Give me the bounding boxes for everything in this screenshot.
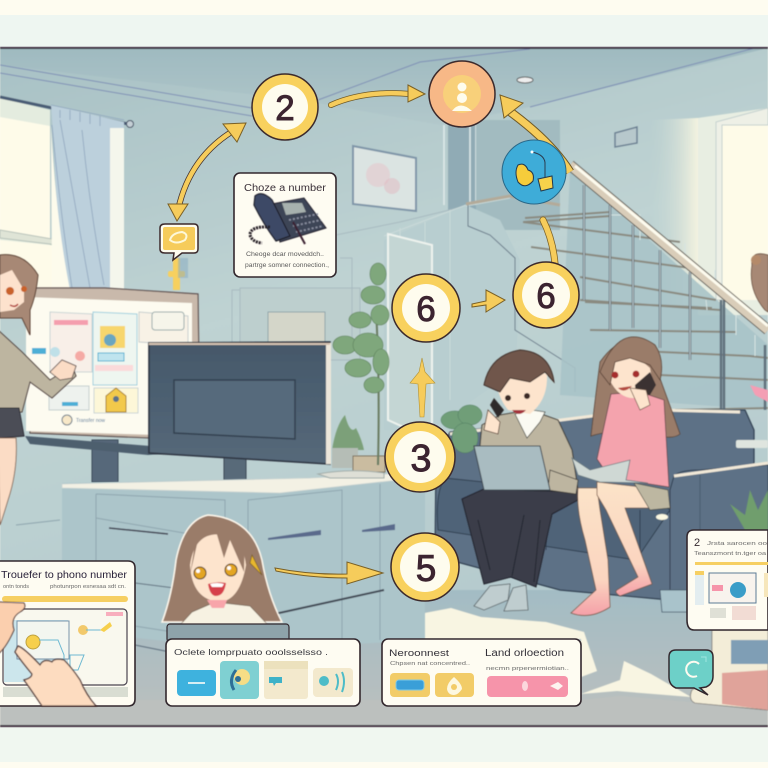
column [448, 120, 476, 210]
step circle 5 [391, 533, 459, 601]
left window [0, 97, 134, 300]
hand pointing [0, 602, 96, 706]
caption right: necmn prpenermiotian.. [486, 666, 570, 672]
cabinet [16, 472, 426, 652]
panel: right details: Jrsta sarocen oo [707, 541, 767, 547]
right furniture [691, 490, 768, 710]
items on cabinet [318, 415, 385, 478]
socks [474, 584, 510, 610]
panel: settings and land [382, 639, 581, 706]
laptop [474, 446, 550, 490]
pink top [597, 392, 669, 487]
ceiling lines [0, 48, 755, 116]
heading left: Neroonnest [389, 648, 449, 659]
man on sofa [462, 350, 578, 611]
caption: Cheoge dcar moveddch.. [246, 251, 324, 258]
caption: ontn tonds [3, 584, 29, 590]
magazine [572, 458, 648, 483]
floor [0, 590, 768, 726]
screen column 2 [93, 312, 137, 385]
shorts [634, 483, 670, 510]
panel: choose a number: partrge somner connection., [245, 263, 329, 269]
sweater [480, 410, 578, 490]
balusters [584, 185, 765, 410]
face [605, 356, 651, 398]
panel: right details: Teanszmont tn.tger oa [694, 551, 767, 557]
orange person circle [429, 61, 495, 127]
handrail [570, 165, 768, 330]
step circle 3: 3 [410, 438, 432, 480]
lower floor band [0, 696, 768, 726]
pink button [487, 676, 568, 697]
framed picture [353, 146, 416, 211]
step circle 2: 2 [275, 89, 295, 128]
arrow: 2 to orange [331, 85, 425, 105]
panel: transfer to phone number: photunrpon esnesaa sdt cn. [50, 584, 127, 590]
ceiling [0, 48, 768, 125]
sun patches [404, 608, 597, 677]
heading: Trouefer to phono number [1, 569, 128, 581]
ceiling light [517, 77, 533, 83]
girl at right edge [750, 254, 768, 402]
arrow: plus connector [168, 258, 188, 290]
step circle 6 left: 6 [416, 290, 436, 329]
step circle 6 right: 6 [536, 277, 556, 316]
lower tiles [94, 388, 138, 413]
arrow: 3 to 6 [410, 358, 435, 417]
panel: right details [687, 530, 768, 630]
step circle 6 left [392, 274, 460, 342]
center girl [162, 515, 282, 625]
panel: choose a number [234, 173, 336, 277]
screen column 1 [50, 312, 92, 372]
shelf alcove [240, 288, 360, 360]
panel: right details: 2 [694, 537, 700, 549]
fern behind sofa [441, 405, 482, 453]
yellow card button [390, 673, 430, 697]
right window [650, 108, 768, 315]
yellow drop button [435, 673, 474, 697]
step circle 2 [252, 74, 318, 140]
sofa arm [670, 465, 768, 590]
step circle 3 [385, 422, 455, 492]
stairs [523, 165, 768, 410]
heading: Choze a number [244, 183, 327, 194]
diagram screen [3, 609, 127, 685]
trousers [462, 489, 578, 587]
phone & hand [490, 398, 504, 418]
cream tile [264, 661, 308, 699]
tab behind options panel [167, 624, 289, 642]
icon: speech bubble [160, 224, 198, 260]
sound tile [313, 668, 353, 697]
hair behind [591, 342, 680, 437]
large monitor: Transfer now [76, 418, 105, 424]
step circle 5: 5 [416, 548, 436, 589]
legs [571, 488, 610, 615]
large monitor [25, 288, 200, 482]
screen column 3 [139, 312, 188, 345]
arrow: girl to 5 [275, 562, 383, 584]
curtain [51, 105, 124, 290]
blue circle icon [502, 140, 566, 204]
head [495, 363, 547, 414]
arrow: 2 to speech icon [168, 123, 246, 221]
icon: teal refresh [669, 650, 713, 695]
TV [149, 342, 331, 490]
heading: Oclete lomprpuato ooolsselsso . [174, 647, 328, 657]
teal tile [220, 661, 259, 699]
caption left: Chpsen nat concentred.. [390, 661, 471, 667]
girl at monitor [0, 255, 76, 525]
step circle 6 right [513, 262, 579, 328]
partition under stairs [384, 205, 520, 430]
wall switch [615, 127, 637, 147]
heading right: Land orloection [485, 648, 564, 659]
panel: transfer to phone number [0, 561, 135, 706]
woman on sofa [571, 337, 680, 615]
arrow: 6 to blue [543, 220, 555, 264]
blue tile [177, 670, 216, 696]
icon: desk telephone [250, 194, 326, 244]
sofa top edge [736, 440, 768, 448]
sofa [435, 410, 768, 612]
landing edge [466, 196, 560, 205]
panel: options [166, 639, 360, 706]
yellow bar [2, 596, 128, 602]
door [388, 234, 432, 440]
arrow: blue to orange [500, 95, 570, 172]
plant [333, 263, 389, 465]
arrow: 6 to 6 [472, 290, 505, 312]
